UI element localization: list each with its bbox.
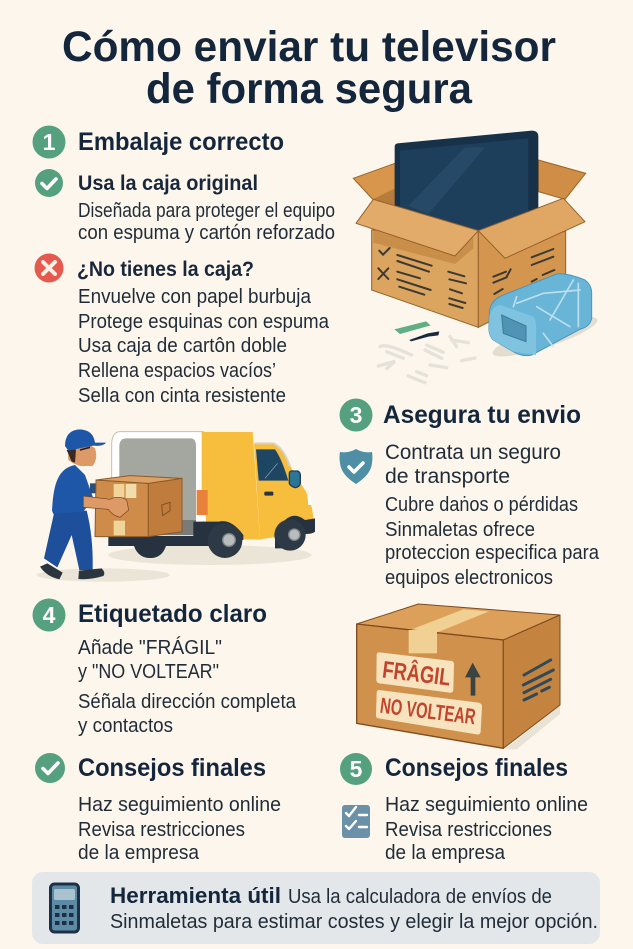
text block: etiquetas: Séñala dirección completa — [78, 691, 297, 713]
side marks — [523, 660, 553, 700]
icon: shield — [340, 449, 372, 484]
text block: no tienes la caja: Protege esquinas con espuma — [78, 311, 330, 333]
flap shadow — [373, 230, 473, 264]
title — [62, 23, 556, 113]
text block: etiquetas: y contactos — [78, 715, 173, 737]
step badge 1: 1 — [43, 129, 56, 155]
title: de forma segura — [146, 65, 473, 113]
interior — [373, 188, 565, 233]
text block: etiquetas: Añade "FRÁGIL" — [78, 636, 222, 659]
step badge 5: 5 — [350, 756, 363, 782]
television — [395, 131, 538, 231]
text block: usa la caja original — [78, 172, 335, 244]
icon: checklist — [342, 805, 370, 838]
front flaps — [356, 199, 478, 256]
box print marks — [378, 248, 554, 308]
heading: consejos finales: Consejos finales — [78, 754, 266, 782]
floor scraps — [378, 321, 475, 383]
text block: seguimiento: Haz seguimiento online — [78, 794, 281, 816]
courier — [40, 429, 106, 579]
text block: seguro de transporte — [385, 441, 600, 589]
text block: seguimiento: Revisa restricciones — [78, 819, 245, 841]
icon: cross — [34, 254, 64, 282]
ground shadows — [37, 545, 312, 582]
label: fragil: FRÂGIL — [381, 655, 452, 692]
parcel side — [503, 615, 560, 748]
step badge 3 — [340, 398, 372, 432]
text block: seguimiento: de la empresa — [385, 842, 506, 864]
title: Cómo enviar tu televisor — [62, 23, 556, 71]
illustration: courier loading van — [37, 429, 315, 582]
tape — [412, 609, 489, 632]
text block: seguimiento — [78, 794, 281, 864]
section 4: etiquetado claro — [32, 598, 297, 737]
text block: no tienes la caja: Rellena espacios vacíos’ — [78, 360, 276, 382]
rear frame — [112, 432, 203, 535]
callout text — [110, 883, 598, 933]
section: consejos finales (left) — [35, 753, 281, 864]
heading: etiquetado claro: Etiquetado claro — [78, 600, 267, 628]
icon: check — [35, 753, 65, 783]
illustration: labelled parcel — [357, 604, 560, 749]
label: no voltear — [376, 690, 482, 735]
heading: consejos finales: Consejos finales — [385, 754, 568, 782]
heading: asegura tu envio: Asegura tu envio — [383, 401, 581, 429]
text block: seguro de transporte: Contrata un seguro — [385, 441, 561, 464]
parcel front — [357, 624, 503, 748]
section 5: consejos finales (right) — [340, 753, 588, 864]
text block: etiquetas: y "NO VOLTEAR" — [78, 661, 219, 683]
icon: calculator — [50, 884, 78, 932]
section 3: asegura tu envio — [340, 398, 600, 589]
text block: usa la caja original: Diseñada para proteger el equipo — [78, 200, 335, 222]
text block: etiquetas — [78, 636, 297, 737]
text block: seguro de transporte: Sinmaletas ofrece — [385, 519, 535, 541]
text block: seguimiento — [385, 794, 588, 864]
text block: seguro de transporte: equipos electronicos — [385, 567, 553, 589]
step badge 1 — [32, 126, 66, 158]
carried parcel — [95, 476, 182, 537]
arrow up — [465, 663, 481, 696]
cargo body — [202, 432, 260, 539]
chassis — [108, 522, 218, 546]
text block: no tienes la caja: Usa caja de cartôn doble — [78, 335, 287, 357]
label: no voltear: NO VOLTEAR — [379, 693, 477, 729]
courier arm and hand — [83, 496, 129, 517]
step badge 4: 4 — [43, 602, 56, 628]
text block: usa la caja original: con espuma y cartón reforzado — [78, 222, 335, 244]
step badge 4 — [32, 598, 66, 632]
illustration: TV in open box with bubble wrap — [353, 131, 601, 383]
panel: herramienta util — [32, 872, 600, 944]
text block: seguimiento: Revisa restricciones — [385, 819, 552, 841]
box front panel — [372, 230, 478, 327]
text block: seguro de transporte: proteccion especifica para — [385, 542, 600, 564]
parcel shadow — [505, 705, 560, 749]
text block: seguimiento: Haz seguimiento online — [385, 794, 588, 816]
cab — [254, 443, 313, 539]
box side panel — [478, 232, 566, 327]
back flaps — [353, 163, 395, 200]
parcel top — [357, 604, 560, 640]
callout text: Sinmaletas para estimar costes y elegir la mejor opción. — [110, 911, 598, 933]
text block: no tienes la caja: ¿No tienes la caja? — [77, 258, 254, 281]
callout text: Usa la calculadora de envíos de — [288, 886, 552, 908]
text block: seguimiento: de la empresa — [78, 842, 200, 864]
step badge 5 — [340, 753, 372, 785]
icon: check — [35, 169, 63, 197]
bubble wrap bundle — [489, 274, 601, 364]
text block: no tienes la caja: Envuelve con papel burbuja — [78, 286, 312, 308]
text block: no tienes la caja: Sella con cinta resistente — [78, 385, 286, 407]
step badge 3: 3 — [350, 402, 362, 428]
section 1: embalaje correcto — [32, 126, 335, 407]
heading: embalaje correcto: Embalaje correcto — [78, 128, 284, 156]
van — [108, 432, 315, 558]
text block: seguro de transporte: Cubre daṅos o pérdidas — [385, 494, 578, 516]
text block: seguro de transporte: de transporte — [385, 465, 510, 488]
text block: usa la caja original: Usa la caja original — [78, 172, 258, 195]
text block: no tienes la caja — [77, 258, 330, 407]
callout text: Herramienta útil — [110, 883, 281, 908]
label: fragil — [376, 652, 454, 693]
